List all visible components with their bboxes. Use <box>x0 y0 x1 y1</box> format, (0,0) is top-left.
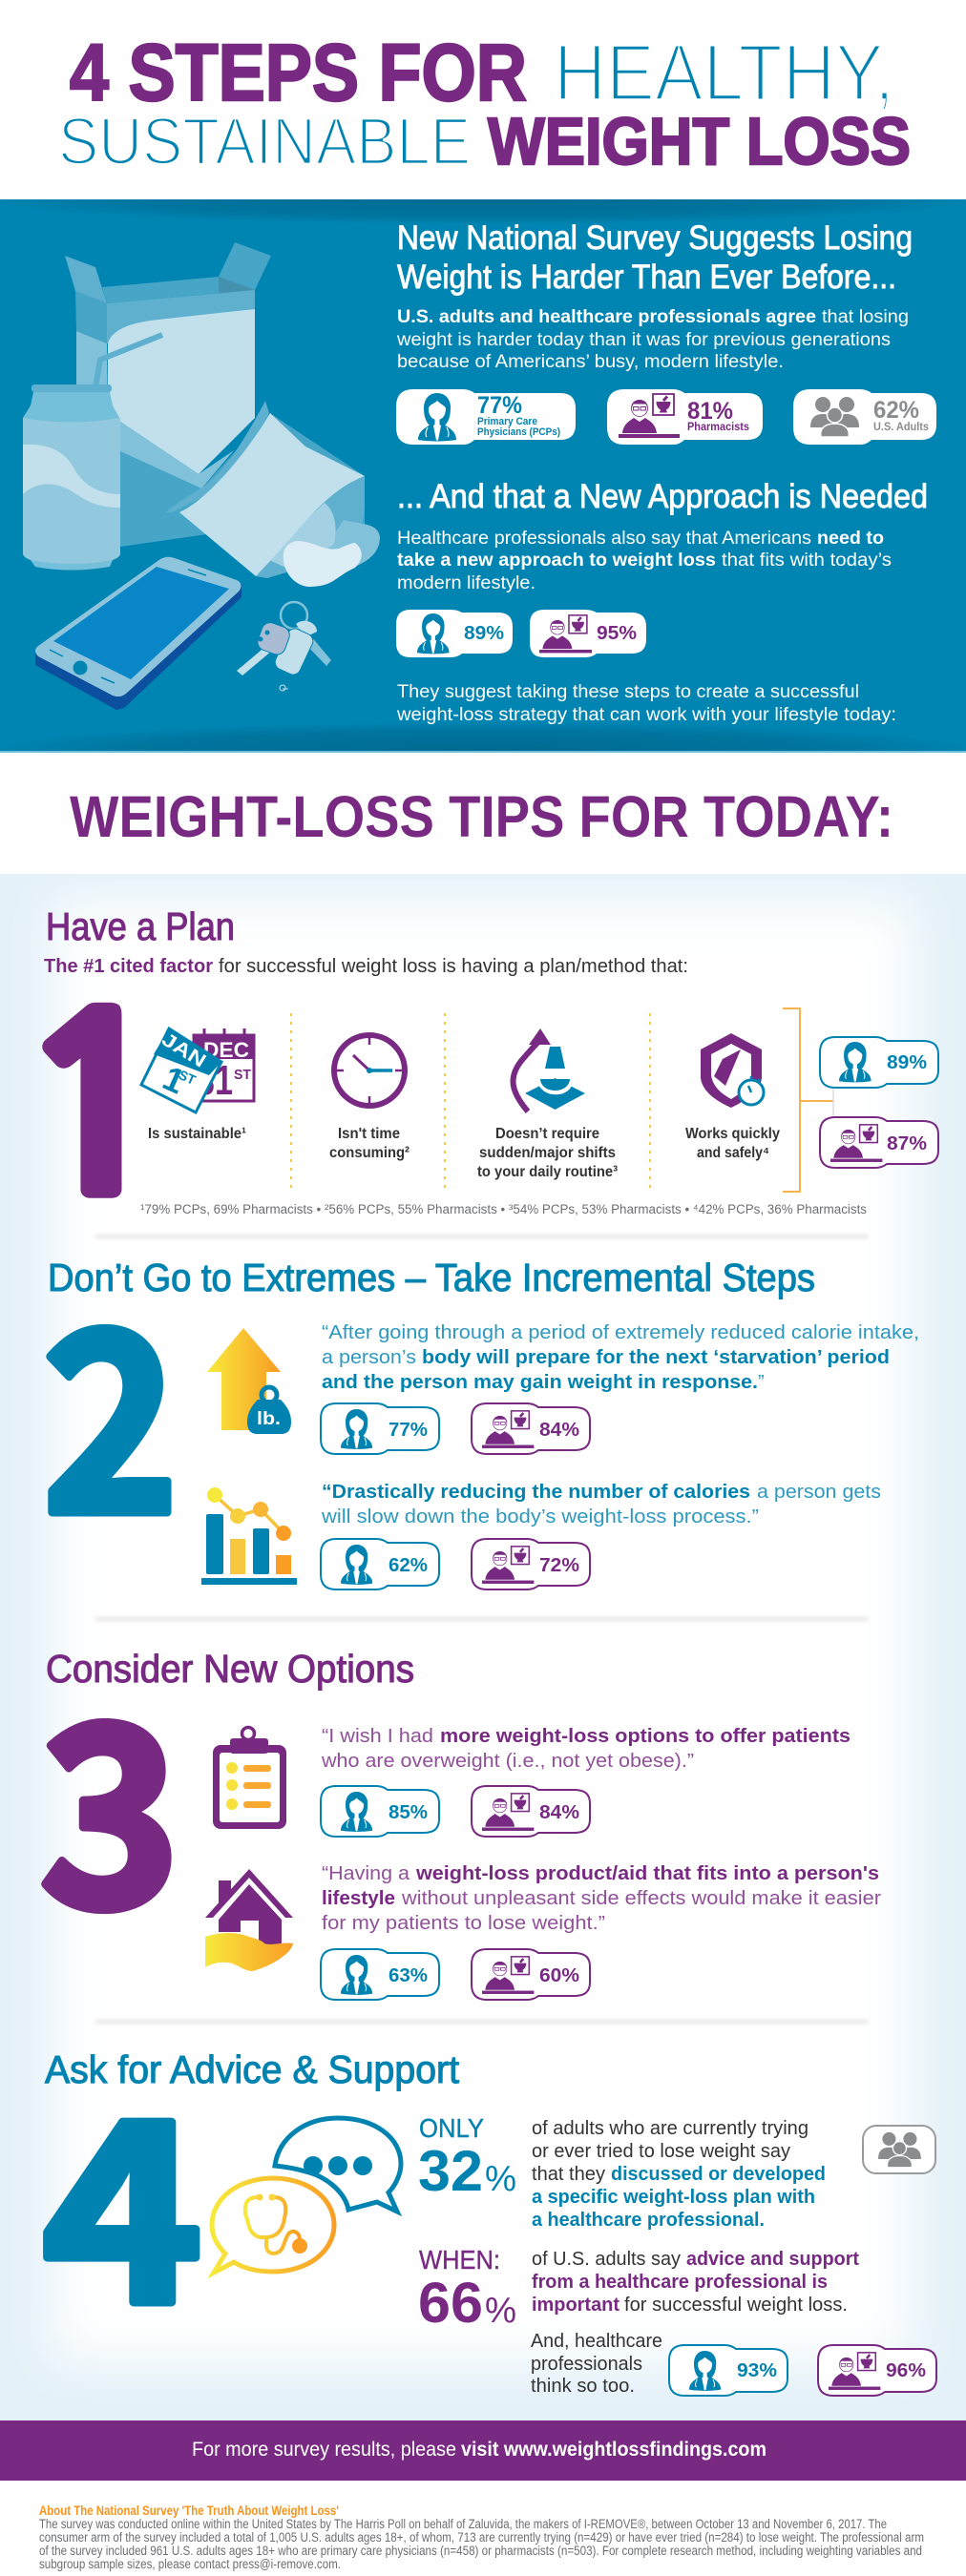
stat pill: U.S. adults 62% <box>793 389 936 445</box>
stat pill: physicians 89% <box>820 1037 938 1088</box>
quote: product fits lifestyle: weight-loss product/aid that fits into a person's <box>415 1863 879 1884</box>
quote: product fits lifestyle <box>322 1863 881 1934</box>
stat pill: primary care physicians 77% <box>396 389 576 445</box>
text block: advice and support: from a healthcare professional is <box>532 2272 828 2293</box>
text block: new approach <box>397 529 892 593</box>
text block: discussed a plan: a healthcare professional. <box>532 2210 765 2231</box>
title: WEIGHT LOSS <box>488 104 911 178</box>
icon: clock <box>334 1035 405 1106</box>
text block: cited factor: The #1 cited factor <box>44 956 213 977</box>
icon: calendars: 31 <box>197 1057 233 1104</box>
stat pill: physicians 89%: 89% <box>887 1051 927 1073</box>
text block: advice and support <box>532 2249 859 2316</box>
icon: house on hand <box>205 1869 293 1971</box>
stat pill: physicians 89% <box>396 610 513 657</box>
stat: only 32%: ONLY <box>419 2113 484 2143</box>
text block: survey summary: because of Americans’ busy, modern lifestyle. <box>397 352 784 372</box>
stat: only 32% <box>418 2113 516 2203</box>
label: works quickly and safely: Works quickly <box>685 1126 780 1142</box>
dotted dividers <box>291 1013 650 1189</box>
stat: when 66%: WHEN: <box>419 2245 500 2275</box>
text block: survey summary: U.S. adults and healthcare professionals agree <box>397 307 816 327</box>
banner: more survey results: For more survey results, please <box>192 2439 456 2461</box>
heading: consider new options: Consider New Options <box>46 1647 414 1691</box>
heading: ask for advice and support: Ask for Advice & Support <box>45 2047 460 2091</box>
stat pill: physicians 93% <box>669 2345 788 2396</box>
icon: bar chart with falling line <box>201 1487 297 1585</box>
quote: product fits lifestyle: lifestyle <box>322 1888 395 1909</box>
text block: survey summary: weight is harder today than it was for previous generations <box>396 330 891 350</box>
quote: slow down <box>321 1482 881 1527</box>
quote: slow down: a person gets <box>757 1482 881 1503</box>
text block: healthcare professionals agree: think so too. <box>531 2376 635 2397</box>
panel: step 1 have a plan <box>14 904 938 1228</box>
text block: survey summary <box>396 307 909 372</box>
stat: when 66% <box>418 2245 516 2335</box>
quote: starvation period: body will prepare for the next ‘starvation’ period <box>422 1347 890 1368</box>
heading: harder than ever: Weight is Harder Than Ever Before... <box>397 259 896 296</box>
stat pill: pharmacists 81%: 81% <box>687 398 733 425</box>
label: not time consuming: consuming² <box>329 1145 410 1161</box>
text block: healthcare professionals agree <box>531 2331 662 2397</box>
quote: more options: “I wish I had <box>322 1726 433 1747</box>
label: not time consuming <box>329 1126 410 1161</box>
icon: calendars: ST <box>177 1067 199 1088</box>
label: is sustainable: Is sustainable¹ <box>148 1126 246 1142</box>
stat pill: pharmacists 84% <box>472 1403 590 1454</box>
icon: teal speech bubble <box>275 2118 401 2212</box>
text block: advice and support: for successful weight loss. <box>624 2295 848 2316</box>
label: no sudden shifts: to your daily routine³ <box>477 1164 618 1180</box>
quote: starvation period: a person’s <box>322 1347 416 1368</box>
title: 4 STEPS FOR <box>70 28 527 117</box>
panel: survey intro band <box>0 175 966 779</box>
stat pill: physicians 77% <box>321 1403 439 1454</box>
stat pill: pharmacists 84%: 84% <box>539 1419 579 1441</box>
footer: about the survey <box>39 2503 924 2571</box>
stat: only 32%: 32 <box>418 2139 483 2203</box>
stat pill: physicians 89%: 89% <box>464 622 504 644</box>
quote: starvation period: ” <box>758 1372 765 1393</box>
panel: step 4 ask for advice <box>42 2012 936 2397</box>
text block: new approach: take a new approach to weight loss <box>397 551 716 571</box>
icon: arrow up with weight: lb. <box>257 1409 281 1429</box>
icon: calendars <box>141 1028 254 1112</box>
stat pill: pharmacists 72%: 72% <box>539 1554 579 1576</box>
heading: harder than ever <box>397 219 913 296</box>
quote: product fits lifestyle: without unpleasant side effects would make it easier <box>401 1888 881 1909</box>
icon: arrow up with weight <box>207 1328 291 1434</box>
banner: more survey results: visit www.weightlossfindings.com <box>461 2439 766 2461</box>
stat pill: U.S. adults 62%: U.S. Adults <box>873 420 929 433</box>
quote: product fits lifestyle: “Having a <box>322 1863 410 1884</box>
text block: suggested steps intro: They suggest taking these steps to create a successful <box>397 682 859 702</box>
quote: starvation period: and the person may gain weight in response. <box>322 1372 758 1393</box>
stat pill: primary care physicians 77%: 77% <box>477 392 522 419</box>
stat pill: pharmacists 72% <box>472 1539 590 1589</box>
stat: when 66%: % <box>485 2291 516 2331</box>
quote: more options <box>321 1726 850 1772</box>
quote: slow down: “Drastically reducing the number of calories <box>322 1482 750 1503</box>
heading: new approach needed: ... And that a New Approach is Needed <box>397 478 928 515</box>
stat pill: physicians 62% <box>321 1539 439 1589</box>
text block: advice and support: important <box>532 2295 620 2316</box>
text block: new approach: modern lifestyle. <box>397 573 536 593</box>
stat pill: U.S. adults 62%: 62% <box>873 397 919 424</box>
stat pill: adults group icon <box>863 2126 935 2173</box>
text block: discussed a plan: that they <box>532 2164 605 2185</box>
heading: don't go to extremes: Don’t Go to Extremes – Take Incremental Steps <box>48 1256 815 1299</box>
text block: new approach: need to <box>817 529 884 549</box>
stat pill: pharmacists 87% <box>820 1117 938 1168</box>
stat pill: pharmacists 81%: Pharmacists <box>687 420 749 433</box>
text block: new approach: Healthcare professionals also say that Americans <box>397 529 811 549</box>
bracket connector <box>783 1008 833 1192</box>
stat pill: pharmacists 60% <box>472 1949 590 2000</box>
label: no sudden shifts: sudden/major shifts <box>479 1145 616 1161</box>
title: HEALTHY, <box>554 28 894 117</box>
label: no sudden shifts <box>477 1126 618 1180</box>
footnote: ¹79% PCPs, 69% Pharmacists • ²56% PCPs, 55% Pharmacists • ³54% PCPs, 53% Pharmacists • ⁴42% PCPs, 36% Pharmacists <box>140 1202 867 1216</box>
text block: cited factor: for successful weight loss is having a plan/method that: <box>219 956 688 977</box>
text block: discussed a plan: a specific weight-loss plan with <box>532 2187 815 2208</box>
text block: new approach: that fits with today’s <box>722 551 892 571</box>
text block: advice and support: of U.S. adults say <box>532 2249 681 2270</box>
numeral 1: 1 <box>14 987 176 1228</box>
stat pill: pharmacists 84% <box>472 1786 590 1837</box>
icon: clipboard <box>213 1727 286 1829</box>
numeral 2: 2 <box>42 1223 179 1585</box>
panel: step 3 consider new options <box>39 1616 881 2000</box>
text block: discussed a plan: discussed or developed <box>611 2164 826 2185</box>
numeral 3: 3 <box>39 1616 180 1978</box>
quote: starvation period: “After going through a period of extremely reduced calorie intake, <box>322 1322 919 1343</box>
label: no sudden shifts: Doesn’t require <box>495 1126 599 1142</box>
stat pill: pharmacists 81% <box>607 389 763 445</box>
stat pill: physicians 85%: 85% <box>388 1801 428 1823</box>
quote: slow down: will slow down the body’s weight-loss process.” <box>321 1506 759 1527</box>
stat pill: pharmacists 96% <box>818 2345 936 2396</box>
icon: traffic cone with curved arrow <box>514 1028 585 1111</box>
text block: suggested steps intro <box>396 682 896 725</box>
heading: have a plan: Have a Plan <box>46 904 235 948</box>
quote: starvation period <box>322 1322 919 1393</box>
heading: harder than ever: New National Survey Suggests Losing <box>397 219 913 257</box>
text block: survey summary: that losing <box>822 307 909 327</box>
stat pill: pharmacists 96%: 96% <box>886 2359 926 2381</box>
text block: healthcare professionals agree: And, healthcare <box>531 2331 662 2352</box>
footer: about the survey: subgroup sample sizes, please contact press@i-remove.com. <box>39 2557 341 2571</box>
panel: tips background <box>0 874 966 2420</box>
quote: more options: who are overweight (i.e., not yet obese).” <box>321 1751 694 1772</box>
text block: discussed a plan <box>532 2118 826 2231</box>
label: works quickly and safely <box>685 1126 780 1161</box>
icon: calendars: ST <box>234 1067 251 1083</box>
stat pill: pharmacists 95%: 95% <box>597 622 637 644</box>
text block: advice and support: advice and support <box>686 2249 859 2270</box>
label: not time consuming: Isn't time <box>338 1126 400 1142</box>
label: works quickly and safely: and safely⁴ <box>697 1145 769 1161</box>
text block: healthcare professionals agree: professionals <box>531 2354 642 2375</box>
title <box>58 28 911 178</box>
title: SUSTAINABLE <box>58 104 471 178</box>
icon: calendars: 1 <box>158 1058 191 1101</box>
heading: weight-loss tips for today: WEIGHT-LOSS TIPS FOR TODAY: <box>70 784 893 849</box>
icon: calendars: JAN <box>158 1029 209 1072</box>
quote: product fits lifestyle: for my patients to lose weight.” <box>322 1913 605 1934</box>
stat pill: pharmacists 84%: 84% <box>539 1801 579 1823</box>
icon: calendars: DEC <box>203 1038 249 1062</box>
stat pill: pharmacists 95% <box>530 610 646 657</box>
text block: discussed a plan: or ever tried to lose weight say <box>532 2141 790 2162</box>
text block: suggested steps intro: weight-loss strategy that can work with your lifestyle today: <box>396 705 896 725</box>
stat pill: physicians 63% <box>321 1949 439 2000</box>
icon: shield with stopwatch <box>701 1033 764 1108</box>
illustration: cereal box, can, bag, phone and keys <box>23 242 380 710</box>
stat pill: physicians 85% <box>321 1786 439 1837</box>
stat pill: primary care physicians 77%: Physicians (PCPs) <box>477 426 560 438</box>
stat pill: physicians 93%: 93% <box>737 2359 777 2381</box>
panel: step 2 incremental steps <box>42 1223 919 1589</box>
numeral 4: 4 <box>42 2012 202 2375</box>
footer: about the survey: About The National Survey 'The Truth About Weight Loss' <box>39 2503 339 2518</box>
stat pill: physicians 63%: 63% <box>388 1964 428 1986</box>
stat pill: physicians 62%: 62% <box>388 1554 428 1576</box>
text block: discussed a plan: of adults who are currently trying <box>532 2118 808 2139</box>
icon: stethoscope speech bubble <box>212 2178 334 2273</box>
stat pill: physicians 77%: 77% <box>388 1419 428 1441</box>
quote: more options: more weight-loss options to offer patients <box>440 1726 850 1747</box>
stat pill: primary care physicians 77%: Primary Care <box>477 416 537 427</box>
stat pill: pharmacists 87%: 87% <box>887 1132 927 1154</box>
stat: only 32%: % <box>485 2159 516 2199</box>
stat pill: pharmacists 60%: 60% <box>539 1964 579 1986</box>
stat: when 66%: 66 <box>418 2271 483 2335</box>
banner: more survey results <box>0 2420 966 2481</box>
